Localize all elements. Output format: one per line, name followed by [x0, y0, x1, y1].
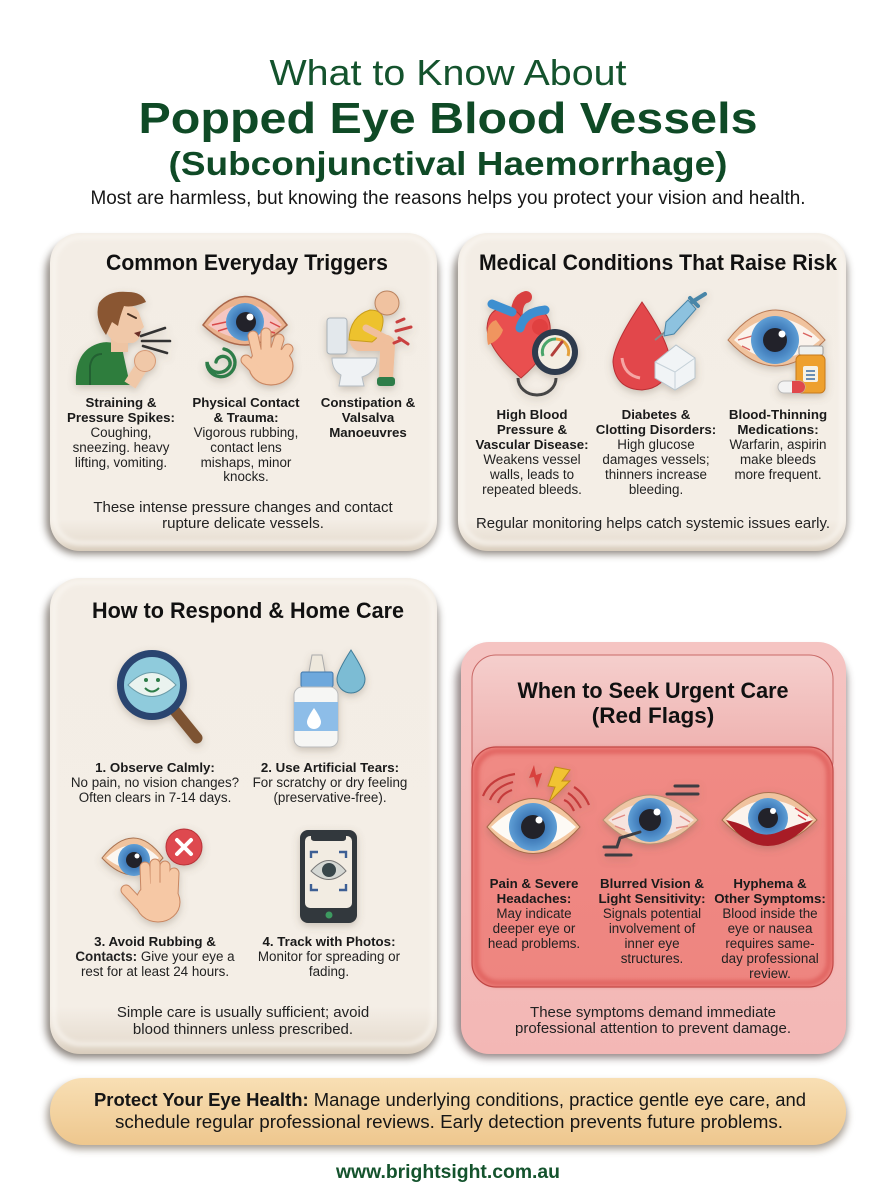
footer: triggers: These intense pressure changes and contact	[93, 499, 394, 516]
heading: medical conditions: Medical Conditions That Raise Risk	[479, 250, 837, 275]
text: physical contact: Physical Contact	[192, 395, 300, 410]
footer: home care: blood thinners unless prescribed.	[133, 1021, 353, 1038]
footer: urgent care: professional attention to prevent damage.	[515, 1020, 791, 1037]
text: hyphema	[714, 876, 826, 981]
website url: www.brightsight.com.au	[335, 1162, 560, 1183]
icon: blurred vision eye	[603, 786, 698, 855]
text: straining: lifting, vomiting.	[75, 455, 167, 470]
footer: triggers	[93, 499, 394, 532]
heading: home care: How to Respond & Home Care	[92, 598, 404, 623]
icon: heart with gauge	[487, 297, 578, 395]
text: blurred vision	[598, 876, 706, 966]
text: pain and headaches: Headaches:	[497, 891, 571, 906]
text: blood thinners: Warfarin, aspirin	[730, 437, 826, 452]
header block: red flags	[472, 655, 833, 785]
text: blurred vision: Signals potential	[603, 906, 701, 921]
text: diabetes: High glucose	[617, 437, 695, 452]
subtitle: Most are harmless, but knowing the reasons helps you protect your vision and health.	[90, 187, 806, 209]
text: hyphema: Hyphema &	[733, 876, 807, 891]
text: straining: Straining &	[86, 395, 157, 410]
text: observe calmly: Often clears in 7-14 days.	[79, 790, 231, 805]
text: blood thinners: Medications:	[737, 422, 819, 437]
text: avoid rubbing: Contacts: Give your eye a	[75, 949, 235, 964]
text: high blood pressure: repeated bleeds.	[482, 482, 582, 497]
text: blurred vision: inner eye	[624, 936, 680, 951]
text: physical contact	[192, 395, 300, 484]
heading: red flags: When to Seek Urgent Care	[518, 678, 788, 703]
text: blood thinners: make bleeds	[740, 452, 816, 467]
footer: home care	[117, 1004, 369, 1038]
title: (Subconjunctival Haemorrhage)	[168, 145, 728, 182]
text: hyphema: Blood inside the	[722, 906, 818, 921]
text: blood thinners: more frequent.	[734, 467, 822, 482]
icon: coughing man	[76, 292, 170, 385]
panel: urgent care red flags	[456, 642, 847, 1058]
heading: red flags	[518, 678, 788, 728]
text: high blood pressure	[475, 407, 589, 497]
text: constipation: Valsalva	[342, 410, 395, 425]
text: pain and headaches	[488, 876, 580, 951]
icon: rubbing red eye	[203, 296, 293, 385]
text: physical contact: knocks.	[223, 469, 269, 484]
text: physical contact: & Trauma:	[213, 410, 279, 425]
panel: common everyday triggers	[46, 233, 438, 554]
text: blurred vision: Light Sensitivity:	[598, 891, 706, 906]
panel: how to respond and home care	[46, 578, 438, 1058]
text: track with photos	[258, 934, 401, 979]
text: artificial tears: (preservative-free).	[273, 790, 387, 805]
title: What to Know About	[270, 52, 626, 93]
text: physical contact: contact lens	[210, 440, 282, 455]
banner: protect your eye health: schedule regular professional reviews. Early detection prevents future problems.	[115, 1112, 783, 1132]
text: pain and headaches: deeper eye or	[493, 921, 576, 936]
text: straining: Coughing,	[90, 425, 152, 440]
banner: protect your eye health	[47, 1078, 847, 1149]
text: physical contact: mishaps, minor	[201, 455, 292, 470]
heading: red flags: (Red Flags)	[592, 703, 714, 728]
text: constipation	[321, 395, 416, 440]
icon: eye with medication	[728, 310, 825, 393]
text: high blood pressure: Vascular Disease:	[475, 437, 589, 452]
footer: urgent care: These symptoms demand immediate	[530, 1004, 776, 1021]
text: blood thinners: Blood-Thinning	[729, 407, 827, 422]
text: observe calmly: No pain, no vision changes?	[71, 775, 239, 790]
text: diabetes	[596, 407, 716, 497]
text: high blood pressure: High Blood	[497, 407, 567, 422]
panel: medical conditions	[454, 233, 847, 554]
text: pain and headaches: Pain & Severe	[490, 876, 578, 891]
text: track with photos: Monitor for spreading or	[258, 949, 401, 964]
text: blurred vision: Blurred Vision &	[600, 876, 704, 891]
text: track with photos: 4. Track with Photos:	[262, 934, 396, 949]
footer: triggers: rupture delicate vessels.	[162, 515, 324, 532]
icon: phone tracking	[300, 830, 357, 923]
text: straining	[67, 395, 175, 470]
text: observe calmly	[71, 760, 239, 805]
text: diabetes: Clotting Disorders:	[596, 422, 716, 437]
footer: urgent care	[515, 1004, 791, 1037]
footer: home care: Simple care is usually sufficient; avoid	[117, 1004, 369, 1021]
title: Popped Eye Blood Vessels	[138, 94, 758, 143]
icon: magnifier with eye	[117, 650, 197, 738]
text: hyphema: Other Symptoms:	[714, 891, 826, 906]
inner red panel	[472, 747, 833, 987]
text: blurred vision: involvement of	[609, 921, 695, 936]
text: hyphema: day professional	[721, 951, 819, 966]
text: avoid rubbing	[75, 934, 235, 979]
text: artificial tears: For scratchy or dry feeling	[253, 775, 407, 790]
icon: person on toilet	[327, 291, 411, 386]
text: hyphema: review.	[749, 966, 791, 981]
footer: medical: Regular monitoring helps catch systemic issues early.	[476, 515, 830, 532]
text: hyphema: requires same-	[725, 936, 815, 951]
text: observe calmly: 1. Observe Calmly:	[95, 760, 215, 775]
text: avoid rubbing: 3. Avoid Rubbing &	[94, 934, 216, 949]
text: hyphema: eye or nausea	[728, 921, 813, 936]
text: constipation: Manoeuvres	[329, 425, 407, 440]
text: straining: Pressure Spikes:	[67, 410, 175, 425]
text: high blood pressure: Weakens vessel	[483, 452, 581, 467]
text: track with photos: fading.	[309, 964, 349, 979]
banner: protect your eye health: Protect Your Eye Health: Manage underlying conditions, practice gentle eye care, and	[94, 1090, 806, 1110]
text: artificial tears	[253, 760, 407, 805]
text: high blood pressure: Pressure &	[497, 422, 568, 437]
text: diabetes: bleeding.	[629, 482, 683, 497]
icon: avoid rubbing	[102, 829, 202, 922]
icon: eye drop bottle	[294, 650, 365, 747]
title	[138, 52, 758, 182]
text: artificial tears: 2. Use Artificial Tears:	[261, 760, 399, 775]
icon: blood drop, sugar cube, syringe	[613, 294, 705, 390]
text: pain and headaches: head problems.	[488, 936, 580, 951]
text: diabetes: thinners increase	[605, 467, 707, 482]
text: blurred vision: structures.	[621, 951, 683, 966]
text: straining: sneezing. heavy	[73, 440, 170, 455]
icon: eye with headache	[483, 765, 589, 854]
text: physical contact: Vigorous rubbing,	[194, 425, 298, 440]
text: pain and headaches: May indicate	[496, 906, 572, 921]
text: high blood pressure: walls, leads to	[489, 467, 574, 482]
text: diabetes: Diabetes &	[622, 407, 691, 422]
text: constipation: Constipation &	[321, 395, 416, 410]
text: diabetes: damages vessels;	[602, 452, 710, 467]
icon: hyphema eye	[722, 792, 817, 846]
text: blood thinners	[729, 407, 827, 482]
heading: triggers: Common Everyday Triggers	[106, 250, 388, 275]
text: avoid rubbing: rest for at least 24 hours.	[81, 964, 229, 979]
